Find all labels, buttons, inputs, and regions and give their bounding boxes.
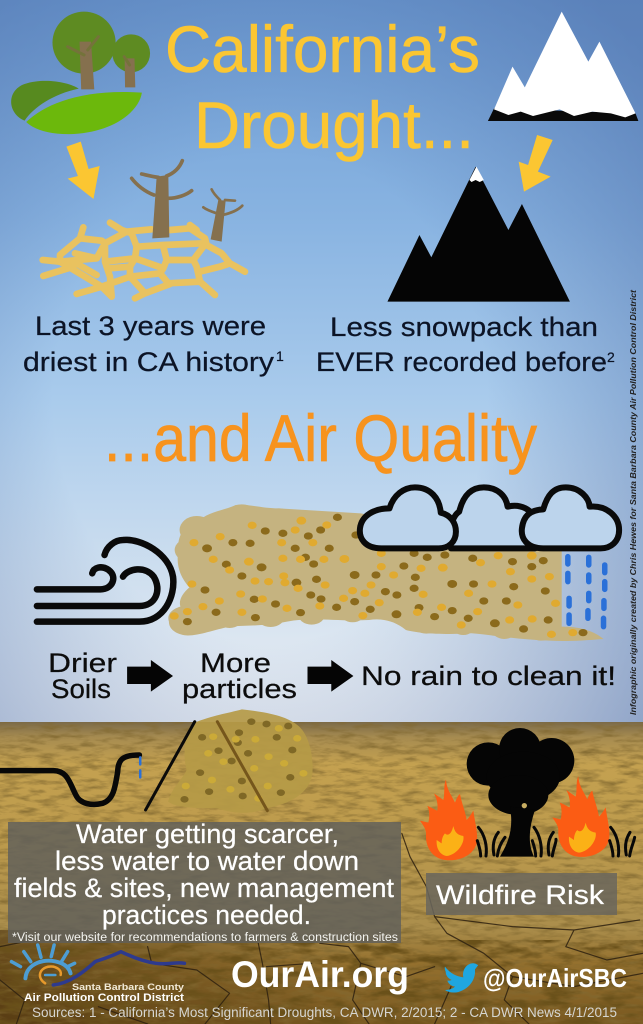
text: less snowpack: EVER recorded before (316, 347, 607, 377)
panel: water scarcity: less water to water down (55, 846, 359, 876)
icon: burnt tree silhouette (467, 728, 574, 857)
text: driest years: Last 3 years were (35, 311, 266, 341)
arrow: snowy mountain to bare mountain (519, 135, 553, 192)
panel: water scarcity: Water getting scarcer, (76, 819, 339, 849)
label: More particles: More (200, 648, 271, 678)
panel: wildfire risk (426, 873, 617, 915)
panel: water scarcity: practices needed. (102, 900, 311, 930)
label: Drier Soils: Drier (48, 648, 117, 678)
arrow: soils to particles (127, 660, 173, 692)
arrow: particles to no rain (308, 660, 353, 692)
text: less snowpack: Less snowpack than (330, 312, 598, 342)
sources line: Sources: 1 - California’s Most Significant Droughts, CA DWR, 2/2015; 2 - CA DWR News 4/1/2015 (32, 1005, 617, 1020)
icon: clouds (360, 487, 619, 548)
label: More particles: particles (182, 674, 297, 704)
icon: flames left and right (420, 776, 609, 860)
icon: healthy trees on green hill (11, 12, 150, 134)
label: No rain to clean it: No rain to clean it! (361, 661, 616, 691)
dust cloud with particles (168, 504, 604, 641)
credit: vertical attribution: Infographic originally created by Chris Hewes for Santa Barbara County Air Pollution Control District (628, 289, 638, 715)
twitter handle: @OurAirSBC (483, 963, 627, 993)
label: More particles (182, 648, 297, 704)
label: Drier Soils (48, 648, 117, 704)
panel: water scarcity: *Visit our website for recommendations to farmers & construction sites (12, 932, 398, 944)
text: less snowpack: 2 (607, 349, 615, 365)
icon: dust blocked by fence line (146, 709, 313, 813)
text: driest years (23, 311, 284, 377)
icon: snow-covered mountain (488, 12, 638, 121)
heading: and Air Quality: ...and Air Quality (104, 401, 537, 475)
arrow: healthy land to dry land (66, 142, 100, 199)
cracked earth ground (0, 722, 643, 1024)
panel: water scarcity (8, 819, 401, 944)
icon: bare black mountain (387, 167, 570, 302)
panel: wildfire risk: Wildfire Risk (436, 880, 605, 910)
panel: water scarcity: fields & sites, new management (14, 873, 394, 903)
title: California's Drought: California’s (165, 12, 480, 86)
logo: Santa Barbara County APCD: Santa Barbara County (72, 982, 184, 992)
icon: rain drops (568, 557, 605, 627)
text: driest years: 1 (276, 348, 284, 364)
label: Drier Soils: Soils (51, 674, 111, 704)
text: less snowpack (316, 312, 615, 377)
title: California's Drought (165, 12, 480, 162)
icon: dead trees on cracked soil (43, 161, 245, 298)
title: California's Drought: Drought... (194, 88, 474, 162)
logo: Santa Barbara County APCD (11, 945, 185, 1004)
icon: twitter bird (445, 963, 478, 993)
website link: OurAir.org (231, 954, 409, 995)
logo: Santa Barbara County APCD: Air Pollution Control District (24, 992, 184, 1004)
sky background (0, 0, 643, 723)
icon: irrigation hose with drip (0, 755, 140, 804)
icon: dry grass tufts (477, 827, 635, 856)
text: driest years: driest in CA history (23, 347, 275, 377)
cracked soil network (43, 223, 245, 298)
icon: wind (37, 540, 173, 622)
